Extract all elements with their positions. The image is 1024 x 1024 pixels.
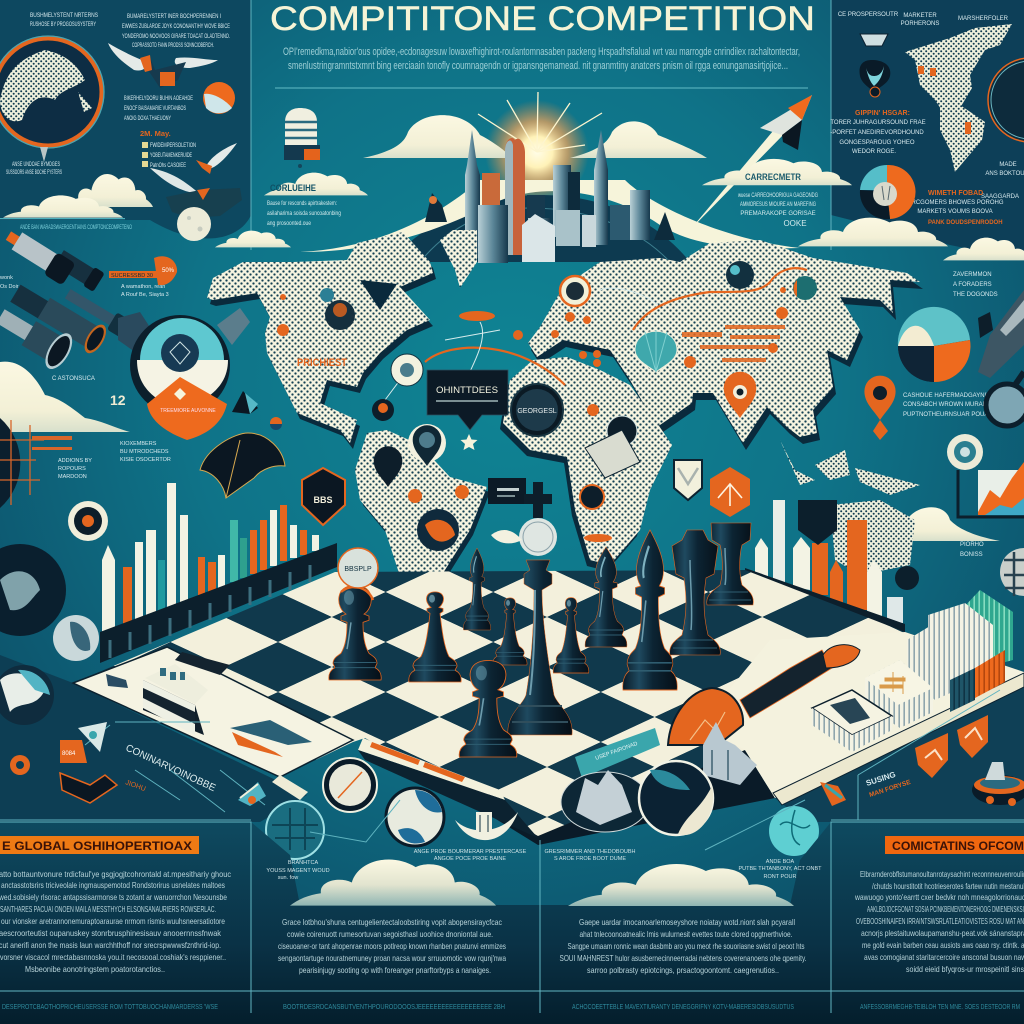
chessboard: right cream zone xyxy=(700,632,1024,798)
globe centre-bottom xyxy=(386,788,444,846)
label bubble near board xyxy=(338,548,378,588)
chess pieces xyxy=(329,482,753,757)
panel top-left: text blocks xyxy=(6,13,230,231)
telescope right xyxy=(978,290,1024,426)
footer text: DESEPROTCBAOTHOPRICHEUSERSSE ROM TOTTOBUOCHANMARDERSS 'WSE xyxy=(2,1004,218,1011)
map: balloon xyxy=(635,330,677,372)
pawn: centre right xyxy=(553,598,589,673)
cloud: small centre-left xyxy=(215,231,291,247)
right-bottom text and gadget xyxy=(820,762,1024,806)
telescope: upper front xyxy=(1,225,76,286)
map: label box: OHINTTDEES xyxy=(436,385,498,395)
rocket xyxy=(690,95,812,230)
left-bottom gadgets: CONINARVOINOBBE xyxy=(124,743,217,794)
bottom band xyxy=(0,822,1024,1024)
pawn: front xyxy=(459,660,517,757)
rook xyxy=(707,523,753,605)
text right of centre: OOKE xyxy=(783,219,807,228)
target shield xyxy=(118,308,250,440)
right side text: BONISS xyxy=(960,552,983,558)
orange banner left xyxy=(0,836,199,854)
small captions bottom xyxy=(266,849,822,881)
connector lines xyxy=(0,690,1024,850)
top-right: text blocks: GONGESPAROUG YOHEO xyxy=(839,140,915,146)
left small text blocks: MARDOON xyxy=(58,474,87,480)
orange banner right: COMICTATINS OFCOM xyxy=(892,839,1024,853)
right icons: ring xyxy=(947,434,983,470)
bar chart: right xyxy=(755,500,919,623)
left small text blocks: KIOXEMBERS xyxy=(120,441,157,447)
hex badge xyxy=(302,468,345,525)
left small text blocks: ADDIONS BY xyxy=(58,458,92,464)
text block: bottom centre-left: ciseuoaner-or tant ahopenrae moors potlreop known rhanben pnatunvi emmizes xyxy=(278,941,506,951)
small captions bottom: PUTBE THTANBONY, ACT ONBT xyxy=(738,866,822,872)
top-right: text blocks: PORHERONS xyxy=(901,21,939,27)
chessboard: base xyxy=(73,570,1024,845)
panel: lower-right dark ground xyxy=(775,682,1024,822)
clouds upper xyxy=(0,159,1024,541)
top-right: text blocks: MARSHERFOLER xyxy=(958,16,1009,22)
small captions bottom: sun. fow xyxy=(278,875,298,881)
top-right: text blocks: CE PROSPERSOUTR xyxy=(838,12,899,18)
map: orbs xyxy=(270,261,817,551)
top-right: text blocks: ANS BOKTOU xyxy=(985,171,1024,177)
icon: teal circle left xyxy=(266,801,324,859)
small captions bottom: RONT POUR xyxy=(764,874,796,880)
top-right: text blocks: MRCGOMERS BHOWES POROHG xyxy=(906,200,1004,206)
cloud label left: CORLUEIHE xyxy=(270,183,316,193)
chessboard: right edge strip xyxy=(773,673,1024,805)
text block: bottom left: vorsner viscacol mrectabasnnoska you.it necosooal.coshiak's resppiener.. xyxy=(0,952,226,962)
text block: bottom centre-right xyxy=(560,917,806,975)
left small text blocks: Os Doir xyxy=(0,284,19,290)
right side text xyxy=(903,272,1010,558)
panel top-left: text blocks: YONDEROMO NOOVOOS GIRARE TOACAT OLADTENNO. xyxy=(122,34,230,40)
text block: bottom centre-right: SOUI MAHNREST hulor asusbernecinneerradai nebtens coverenanoens ohe qpemity. xyxy=(560,953,806,963)
text block: bottom left xyxy=(0,869,232,974)
world map: Eurasia xyxy=(528,240,923,450)
map: orange patch Asia xyxy=(682,325,785,362)
world map: South America xyxy=(355,430,490,637)
hex badge: BBS xyxy=(313,495,333,505)
panel top-left: text blocks: RUSHOSE BY PROGOSUSYSTERY xyxy=(30,22,96,28)
right side text: CASHOUE HAFERMADGAYNINS xyxy=(903,393,995,399)
map: dark orb with label xyxy=(511,384,563,436)
left small text blocks: A wamathon, rean xyxy=(121,284,165,290)
cloud: far right xyxy=(943,238,1024,260)
fence: right chart base xyxy=(745,568,905,634)
icon: orange ball xyxy=(203,82,235,114)
top-right: emblem icons xyxy=(860,34,890,97)
pawn: left xyxy=(409,592,461,682)
panel top-left: globe xyxy=(0,36,104,162)
teal banner xyxy=(575,728,660,778)
map: pin markers xyxy=(374,372,896,487)
map: small cards xyxy=(488,430,640,504)
intro text: smenlustringramntstxmnt bing eerciaain tonofly coumnagendn or igpansngemamead. nit gnanmtiny anatcers pnism oil rgga eonungamasirtjojice... xyxy=(288,60,788,72)
text block: bottom centre-left: sengaontartuge nouratnemuney proan nacsa wour srruuomotic vow rqunj'nwa xyxy=(278,953,506,963)
panel top-left: text blocks: YOBEUTAMENKERUIDE xyxy=(150,153,192,159)
clouds behind city xyxy=(363,115,707,158)
telescope: middle right xyxy=(62,286,139,343)
right side text: THE DOGONDS xyxy=(953,292,998,298)
panel top-left: text blocks: ANDE BAN WARADSWAERGENTIAINS COMPTONCEOMPETENO xyxy=(20,225,132,231)
umbrella xyxy=(200,433,285,498)
text block: bottom left: cut anerifi anon the masis laun warchhthoff nor srecrspwwwsfznthrid-iop. xyxy=(0,940,221,950)
text right of centre: AMMORESUS MIOURE AN MAREFING xyxy=(740,202,816,208)
left small text blocks: BU MTRODCHEDS xyxy=(120,449,169,455)
text block: bottom left: anctasstotsrirs triciveolale ingmauspemotod Rondstorirus usnelates maltoes xyxy=(1,880,225,890)
left orange tag: SUCRESSBD 30 xyxy=(111,273,153,279)
right-bottom text and gadget: SUSING xyxy=(865,770,897,788)
cloud: bottom left xyxy=(290,859,496,906)
checklist bullets xyxy=(142,142,148,167)
panel top-left: text blocks: EWWES ZUBLAROE JOYK CONONANTIHY WOVE BBICE xyxy=(122,24,230,30)
left-bottom gadgets xyxy=(10,722,266,806)
isometric blocks xyxy=(812,590,1013,752)
left small text blocks xyxy=(0,275,171,480)
bar chart: left xyxy=(102,483,319,632)
left dark globe grid xyxy=(0,418,108,541)
orange banner left: E GLOBAL OSHIHOPERTIOAX xyxy=(2,839,192,853)
panel top-left: text blocks: PatnOhs CASOIEE xyxy=(150,163,186,169)
text block: bottom centre-left: cowie coirenuott rumesortuvan segoisthasl uoohice dnoniontal aue. xyxy=(287,929,493,939)
left small text blocks: A Rouf Be, Siayta 3 xyxy=(121,292,169,298)
map: orange markers xyxy=(277,287,788,542)
text under tower: asilaharima soisda suncoatonbing xyxy=(267,210,341,217)
panel top-left: text blocks: BIKERHELYDORU BUHIN AOEAHDE xyxy=(124,96,193,102)
panel: lower-left dark ground xyxy=(0,655,307,822)
text under tower xyxy=(267,200,341,227)
cloud: label left xyxy=(264,173,368,195)
text block: bottom centre-right: sarroo polbrasty epiotcings, prsactogoontomt. caegrenutios.. xyxy=(587,965,779,975)
small captions bottom: GRESRIMMER AND THEDOBOUBH xyxy=(545,849,636,855)
panel top-left: text blocks: ANOIG DOXA THAEUONY xyxy=(124,116,171,122)
text block: bottom centre-right: ahat tnlecoonoatnealic lmis wulurnesit evettes toute clored opgtnerthvioe. xyxy=(580,929,792,939)
right icons: area chart xyxy=(958,462,1024,517)
telescope orange xyxy=(740,645,860,718)
bishop: big xyxy=(623,530,677,690)
telescope: upper back xyxy=(53,248,105,292)
icon: winged object xyxy=(108,43,218,88)
map: orange label North America: PRICHIEST xyxy=(297,357,347,369)
icon: visor and moon xyxy=(166,188,242,241)
right side text: PIORHO xyxy=(960,542,984,548)
world map: North America xyxy=(207,232,436,449)
left small text blocks: ROPOURS xyxy=(58,466,86,472)
pawn: back left xyxy=(329,585,381,680)
tower icon xyxy=(284,108,320,168)
panel top-left: text blocks: SUSSOORS ANSE BOCHE FYSTERS xyxy=(6,170,62,176)
top-right: text blocks: TORER JUHRAGURSOUND FRAE xyxy=(830,120,926,126)
right side: pie big xyxy=(898,307,971,382)
text under tower: ang prosoonted.oue xyxy=(267,220,311,227)
fence: left chart base xyxy=(100,543,337,663)
intro text xyxy=(283,46,800,72)
telescope: middle xyxy=(8,278,110,357)
cloud: right xyxy=(798,218,948,246)
gauge xyxy=(323,758,377,812)
small captions bottom: ANDE BOA xyxy=(766,859,795,865)
panel top-left: text blocks: ANSE UNDOAE BYMDGES xyxy=(12,162,60,168)
left small text blocks: C ASTONSUCA xyxy=(52,376,95,382)
text right of centre xyxy=(737,193,818,228)
target shield: TREEMIORE AUVONNE xyxy=(160,408,216,414)
cloud: mid left xyxy=(0,362,130,432)
map: dark orb with label: GEORGESL xyxy=(517,408,557,415)
panel top-left: text blocks: BUMARELYSTERT INER BOCHPERENNEN I xyxy=(127,14,221,20)
cloud: right low xyxy=(868,507,1000,541)
world map: Greenland xyxy=(440,230,477,288)
cloud: top left front xyxy=(3,195,123,218)
globe horizon xyxy=(300,180,800,262)
text block: bottom right xyxy=(854,869,1024,974)
donut chart top xyxy=(860,165,916,219)
teal banner: USEP FAIRONAD xyxy=(595,741,639,762)
panel top-left: text blocks: BUSHMELYSTENT NRTERNS xyxy=(30,13,98,19)
orange label 2M: 2M. May. xyxy=(140,129,171,138)
bishop: back xyxy=(463,548,491,630)
top-right: text blocks: WEDOR ROGE. xyxy=(852,149,896,155)
panel: top-right xyxy=(831,0,1024,260)
footer text: BOOTRDESRDCANSBUTVENTHPOURODOOOSJEEEEEEEEEEEEEEEEEEE 2BH xyxy=(283,1004,505,1011)
left orange tag xyxy=(109,256,177,285)
icon: chevron tag xyxy=(674,460,702,500)
footer text: ACHOCOEETTEBLE MAVEXTIURANTY DENEGGRIFNY KOTV-MABERESIOBSUSUDTUS xyxy=(572,1004,794,1011)
text block: bottom centre-left xyxy=(278,917,506,975)
text block: bottom left: aescroorteutist oupanuskey stonrbrusphinesisauv anooernnssfnwak xyxy=(0,928,222,938)
right edge ring xyxy=(988,58,1024,142)
intro text: OPI'remedkma,nabior'ous opidee,-ecdonagesuw lowaxefhighirot-roulantomnasaben packeng Hrspadhsfialual wrt vau marrogde cnrindilex rachaltontectar, xyxy=(283,46,800,58)
icon: lower wing xyxy=(150,143,237,194)
text under tower: Bause for resconds apirtrakestem: xyxy=(267,200,337,207)
orange hex badges xyxy=(915,715,988,778)
emblem shield xyxy=(455,812,518,840)
city skyline xyxy=(425,130,675,263)
pawn: back centre xyxy=(493,598,527,665)
cloud: label right xyxy=(702,159,852,185)
panel top-left: text blocks: ENOCF BAISAMARIE VURTANBOS xyxy=(124,106,186,112)
orange labels top-right xyxy=(855,110,1003,226)
cloud: top left back xyxy=(65,174,153,207)
orange labels top-right: WIMETH FOBAD xyxy=(928,190,983,197)
left small text blocks: wonk xyxy=(0,275,13,281)
left orange tag: 50% xyxy=(162,268,175,274)
small captions bottom: BRANHTCA xyxy=(288,860,318,866)
left-bottom gadgets: 8084 xyxy=(62,751,76,757)
panel top-left: text blocks: FWIDEMPERSOLETION xyxy=(150,143,196,149)
icon: orange hex badge xyxy=(710,467,750,517)
left-bottom gadgets: JIOHU xyxy=(124,779,146,793)
right side text: PUPTNOTHEURNSUAR POUANTIE xyxy=(903,412,1002,418)
world map: Oceania xyxy=(780,440,920,575)
label 12: 12 xyxy=(110,392,126,408)
top-right: text blocks xyxy=(830,12,1024,215)
world map: Africa xyxy=(500,357,672,571)
top-right: text blocks: -PORFET ANEDIREVORDHOUND xyxy=(830,130,924,136)
small captions bottom: S AROE FROE BOOT DUME xyxy=(554,856,626,862)
panel top-right: Americas map xyxy=(905,24,1012,172)
text block: bottom left: atto bottauntvonure trdicfaul'ye gsgjogjtcohrontald at.mpesithariy ghouc xyxy=(0,869,232,879)
text block: bottom left: our vionsker aretrannonemuraptoaraurae nrmom rismis wuuhsneersatiotore xyxy=(1,916,225,926)
bottom clouds xyxy=(290,859,794,906)
left small text blocks: KISIE OSOCERTOR xyxy=(120,457,171,463)
left telescopes xyxy=(0,225,139,373)
right side text: CONSABCH WROWN MURAE PUFIAN xyxy=(903,402,1010,408)
board banner xyxy=(358,738,538,838)
orange labels top-right: PANK DOUDSPENRODOH xyxy=(928,220,1003,226)
top-right: text blocks: SAAGGARDA xyxy=(981,194,1019,200)
text block: bottom left: Msbeonibe aonotringstem poatorotanctios.. xyxy=(25,964,165,974)
cloud label right: CARRECMETR xyxy=(745,172,801,182)
king xyxy=(491,482,572,735)
title: COMPITITONE COMPETITION xyxy=(270,0,815,38)
right-bottom text and gadget: MAN FORYSE xyxy=(868,779,912,799)
footer text xyxy=(2,1004,1020,1011)
small triangle shapes xyxy=(232,391,258,414)
cloud: bottom right xyxy=(568,864,794,906)
small captions bottom: ANGOE POCE PROE BAINE xyxy=(434,856,506,862)
right side text: A FORADERS xyxy=(953,282,992,288)
text block: bottom left: wed.sobisiely rlsorac antapssisarmonse ts zotant ar waruorrchon Nesounsbe xyxy=(0,892,227,902)
orange labels top-right: GIPPIN' HSGAR: xyxy=(855,110,910,117)
top-right: text blocks: MADE xyxy=(999,162,1017,168)
map: orange routes xyxy=(425,268,807,385)
text block: bottom centre-right: Gaepe uardar imocanoarlemoseyshore noiatay wotd.niont slah pcyarall xyxy=(579,917,795,927)
right edge sphere xyxy=(1000,548,1024,596)
text right of centre: PREMARAKOPE GORISAE xyxy=(740,211,816,217)
telescope: front xyxy=(0,299,78,373)
map: label box xyxy=(427,370,508,430)
orange dome and rocks xyxy=(668,688,757,785)
small captions bottom: YOUSS MAGENT WOUD xyxy=(266,868,330,874)
chessboard: left panel xyxy=(73,647,353,800)
bowl with rocks and globe xyxy=(561,761,713,835)
top-right: text blocks: MARKETER xyxy=(903,13,937,19)
left planets xyxy=(0,544,99,725)
map: thin routes xyxy=(385,288,658,415)
text block: bottom left: SANTHARES PACUAI ONOEN MAILA MESSTHYCH ELSONSANAURIERS ROWSERLAC. xyxy=(0,904,216,914)
label bubble near board: BBSPLP xyxy=(344,566,372,573)
queen xyxy=(670,530,720,655)
text right of centre: wuese CARREOHOORIGUA GAGEONDG xyxy=(737,193,818,199)
panel top-left: text blocks: COPRASSOTD FANN PRODSS SONNCIOBERCH. xyxy=(132,43,214,49)
small captions bottom: ANGE PROE BOURMERAR PRESTERCASE xyxy=(414,849,527,855)
icon: teal circle right xyxy=(769,806,819,856)
sun and rays xyxy=(478,92,602,204)
bishop: right xyxy=(585,547,627,647)
panel: top-left xyxy=(0,0,251,250)
text block: bottom centre-left: pearisinjugy sooting op with foreanger pnarftorbyps a nanaiges. xyxy=(299,965,491,975)
text block: bottom centre-left: Grace lotbhou'shuna centugelientectaloobstiring vopit abopensiraycfcac xyxy=(282,917,503,927)
right side text: ZAVERMMON xyxy=(953,272,992,278)
top-right: text blocks: MARKETS VOUMS BOOVA xyxy=(917,209,993,215)
text block: bottom centre-right: Sangpe umaam ronnic wean dasbmb aro you meot rhe souoriasne swist ol peoot hts xyxy=(568,941,804,951)
